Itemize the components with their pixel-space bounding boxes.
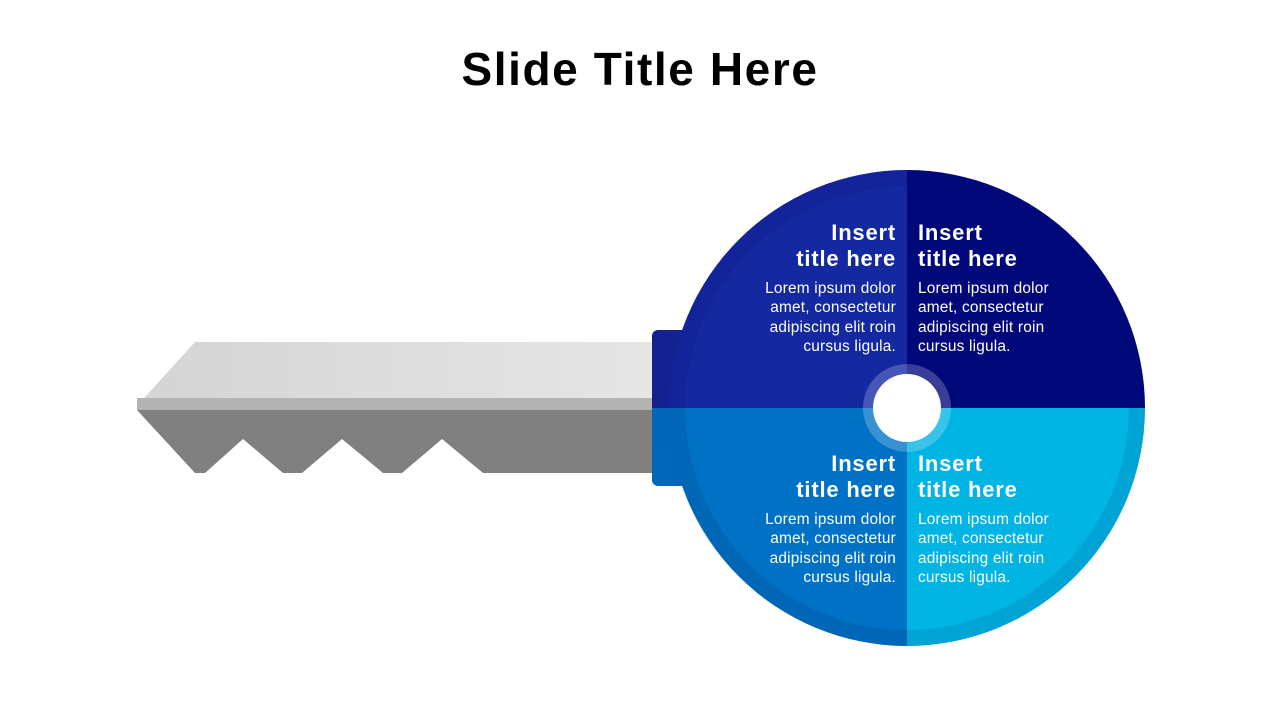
title: Slide Title Here <box>461 43 819 95</box>
text: top-left quadrant: Lorem ipsum dolor <box>765 280 896 297</box>
key tab <box>652 330 692 486</box>
key head: quadrants <box>669 170 1145 646</box>
text: bottom-left quadrant <box>765 451 896 586</box>
text: bottom-left quadrant: cursus ligula. <box>803 569 896 586</box>
text: bottom-left quadrant: adipiscing elit roin <box>770 550 896 567</box>
text: bottom-left quadrant: Lorem ipsum dolor <box>765 511 896 528</box>
key blade <box>135 342 660 473</box>
text: bottom-right quadrant: Lorem ipsum dolor <box>918 511 1049 528</box>
text: bottom-right quadrant <box>918 451 1049 586</box>
text: top-right quadrant: Lorem ipsum dolor <box>918 280 1049 297</box>
text: top-right quadrant <box>918 220 1049 355</box>
text: top-left quadrant: cursus ligula. <box>803 338 896 355</box>
text: top-right quadrant: Insert <box>918 220 983 245</box>
text: top-left quadrant <box>765 220 896 355</box>
text: bottom-left quadrant: title here <box>796 477 896 502</box>
text: bottom-right quadrant: adipiscing elit roin <box>918 550 1044 567</box>
text: top-right quadrant: cursus ligula. <box>918 338 1011 355</box>
text: bottom-right quadrant: Insert <box>918 451 983 476</box>
text: top-left quadrant: title here <box>796 246 896 271</box>
text: bottom-left quadrant: amet, consectetur <box>770 530 896 547</box>
text: bottom-right quadrant: title here <box>918 477 1018 502</box>
text: bottom-left quadrant: Insert <box>831 451 896 476</box>
text: top-left quadrant: Insert <box>831 220 896 245</box>
text: top-right quadrant: amet, consectetur <box>918 299 1044 316</box>
text: top-left quadrant: adipiscing elit roin <box>770 319 896 336</box>
text: top-right quadrant: title here <box>918 246 1018 271</box>
text: top-left quadrant: amet, consectetur <box>770 299 896 316</box>
text: bottom-right quadrant: cursus ligula. <box>918 569 1011 586</box>
text: bottom-right quadrant: amet, consectetur <box>918 530 1044 547</box>
text: top-right quadrant: adipiscing elit roin <box>918 319 1044 336</box>
